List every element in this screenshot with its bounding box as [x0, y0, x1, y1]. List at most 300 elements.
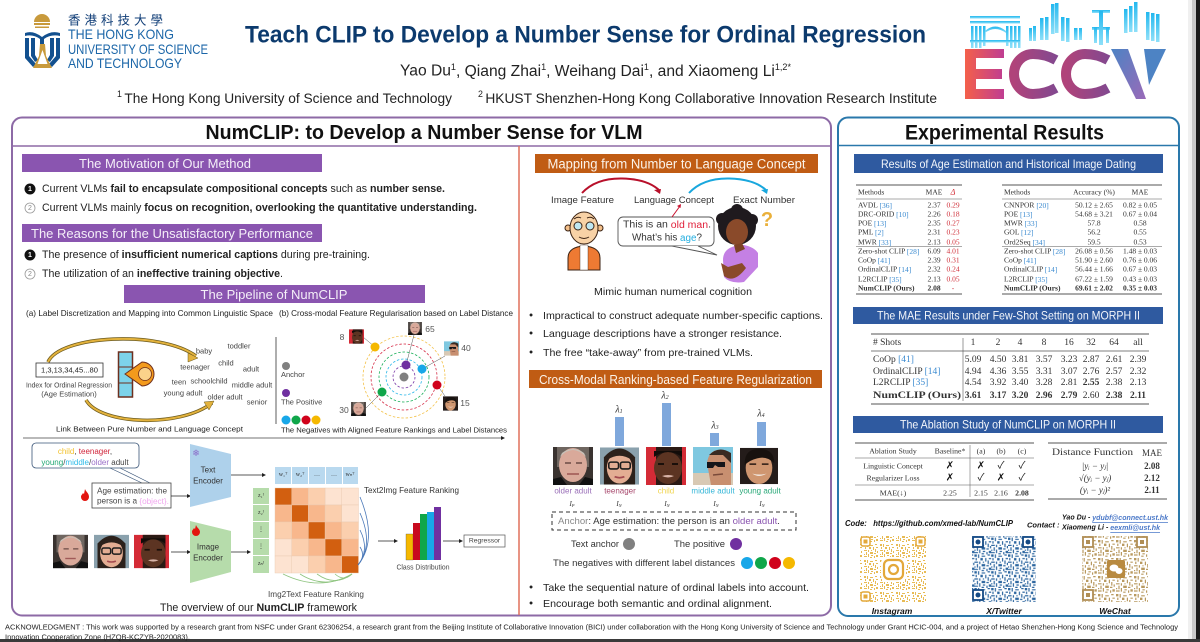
table: distance function: √(yᵢ − yⱼ) — [1079, 473, 1111, 483]
diagram: label discretization: toddler — [228, 342, 251, 350]
table: ablation: 2.16 — [994, 488, 1008, 498]
diagram: NumCLIP framework: ❄ — [192, 448, 200, 458]
diagram: feature regularisation: 8 — [340, 332, 345, 342]
table: historical image dating: 56.2 — [1087, 228, 1101, 236]
table: distance function: 2.11 — [1144, 485, 1160, 495]
logo: HKUST: 香港科技大學 — [68, 10, 163, 28]
table: few-shot: OrdinalCLIP [14] — [873, 367, 940, 377]
table: few-shot: L2RCLIP [35] — [873, 378, 928, 388]
table: distance function: |yᵢ − yⱼ| — [1082, 461, 1108, 471]
table: few-shot: 2.61 — [1106, 355, 1123, 365]
table: age estimation: AVDL [36] — [858, 200, 892, 210]
table: historical image dating: MWR [33] — [1004, 218, 1037, 228]
lambda bars: λ — [661, 390, 666, 402]
table: age estimation: 0.18 — [946, 210, 960, 218]
lambda bars: λ — [711, 420, 716, 432]
faces row: child — [658, 486, 674, 496]
diagram: mapping — [551, 178, 795, 298]
motivation point 2: 2 — [28, 205, 32, 212]
table: distance function: 2.08 — [1144, 461, 1160, 471]
table: historical image dating: 69.61 ± 2.02 — [1075, 284, 1113, 292]
legend — [553, 538, 795, 569]
logo: HKUST: THE HONG KONG — [68, 26, 174, 42]
lambda bars: 2 — [666, 395, 669, 401]
diagram: NumCLIP framework: w₁ᵀ — [279, 472, 288, 478]
subtitle b: (b) Cross-modal Feature Regularisation based on Label Distance — [279, 308, 513, 318]
diagram: NumCLIP framework — [32, 443, 505, 599]
table: few-shot: 3.92 — [990, 378, 1007, 388]
diagram: label discretization: young adult — [164, 388, 203, 398]
diagram: feature regularisation: 65 — [425, 324, 435, 334]
legend: The negatives with different label distances — [553, 558, 736, 568]
mapping bullet list: The free “take-away” from pre-trained VLMs. — [543, 347, 753, 359]
diagram: label discretization: middle adult — [232, 380, 273, 390]
table: age estimation: 0.29 — [946, 200, 960, 210]
faces row: N — [715, 502, 720, 508]
table: ablation: 2.08 — [1015, 488, 1029, 498]
reasons point 2: The utilization of an ineffective training objective. — [42, 268, 283, 280]
speech bubble: What’s his age? — [632, 232, 702, 244]
table: historical image dating: 67.22 ± 1.59 — [1075, 274, 1113, 284]
table: age estimation: 2.13 — [927, 274, 941, 284]
table: distance function: 2.12 — [1144, 473, 1160, 483]
heading: ablation — [853, 416, 1163, 433]
table: ablation: ✓ — [978, 472, 985, 484]
table: age estimation: 0.05 — [946, 274, 960, 284]
diagram: feature regularisation: 30 — [339, 405, 349, 415]
icon: thinking woman: ? — [761, 209, 773, 231]
diagram: NumCLIP framework: Age estimation: the — [97, 486, 168, 496]
table: historical image dating: 0.76 ± 0.06 — [1123, 256, 1157, 264]
diagram: NumCLIP framework: z₁ᴵ — [258, 493, 265, 499]
table: age estimation: 2.31 — [927, 228, 941, 236]
heading: ablation: The Ablation Study of NumCLIP on MORPH II — [900, 418, 1116, 432]
table: age estimation: PML [2] — [858, 228, 884, 236]
table: few-shot: 4.50 — [990, 355, 1007, 365]
table: distance function: MAE — [1142, 448, 1163, 458]
diagram: label discretization: adult — [243, 364, 260, 374]
table: few-shot: 3.40 — [1012, 378, 1029, 388]
anchor sentence: Anchor: Age estimation: the person is an older adult . — [558, 516, 780, 526]
logo: HKUST: AND TECHNOLOGY — [68, 55, 183, 71]
table: few-shot: 3.57 — [1036, 355, 1053, 365]
table: few-shot: 2.60 — [1083, 391, 1100, 401]
diagram: label discretization: child — [218, 358, 234, 368]
ranking bullet list: Take the sequential nature of ordinal labels into account. — [543, 582, 809, 594]
logo: HKUST — [25, 10, 208, 71]
table: ablation: 2.25 — [943, 488, 957, 498]
authors: 1 — [541, 62, 546, 72]
faces row: N — [761, 502, 766, 508]
motivation point 1: 1 — [28, 186, 32, 193]
panel heading: NumCLIP: to Develop a Number Sense for VLM — [206, 122, 642, 144]
diagram: feature regularisation: The Positive — [281, 398, 322, 406]
diagram: label discretization: teen — [172, 378, 186, 386]
lambda bars: 3 — [715, 425, 719, 431]
diagram: NumCLIP framework: Text2Img Feature Ranking — [364, 485, 459, 495]
ranking bullet list: Encourage both semantic and ordinal alignment. — [543, 598, 772, 610]
table: ablation: (b) — [996, 446, 1006, 456]
table: few-shot: 64 — [1109, 338, 1119, 348]
diagram: label discretization: baby — [196, 346, 212, 356]
diagram: feature regularisation: The Negatives with Aligned Feature Rankings and Label Distances — [281, 426, 507, 434]
authors: 1 — [451, 62, 456, 72]
acknowledgment — [5, 622, 1178, 642]
faces row — [553, 447, 781, 508]
table: few-shot: 3.28 — [1036, 378, 1053, 388]
table: historical image dating: CNNPOR [20] — [1004, 200, 1049, 210]
table: few-shot: 3.61 — [965, 391, 982, 401]
table: ablation: ✗ — [977, 460, 985, 472]
table: distance function: (yᵢ − yⱼ)² — [1080, 485, 1110, 495]
table: historical image dating: CoOp [41] — [1004, 256, 1036, 264]
table: historical image dating: Zero-shot CLIP [28] — [1004, 246, 1065, 256]
table: age estimation: 2.39 — [927, 256, 941, 264]
lambda bars: 4 — [762, 412, 765, 419]
faces row: teenager — [604, 486, 636, 496]
table: few-shot: 2.13 — [1130, 378, 1147, 388]
table: age estimation: 2.32 — [927, 264, 941, 274]
diagram: label discretization: Index for Ordinal Regression — [26, 380, 112, 390]
table: age estimation: 2.26 — [927, 210, 941, 218]
table: few-shot: 3.31 — [1036, 367, 1053, 377]
faces row: N — [618, 502, 623, 508]
faces row: I — [616, 500, 619, 508]
mapping bullet list: Language descriptions have a stronger resistance. — [543, 328, 782, 340]
table: few-shot: 16 — [1064, 338, 1074, 348]
table: ablation: ✗ — [946, 460, 954, 472]
faces row: N — [666, 502, 671, 508]
acknowledgment: ACKNOWLEDGMENT : This work was supported by a research grant from NSFC under Grant 62306254, a research grant from the Beijing Institute of Collaborative Innovation (BICI) under collaboration with the Hong Kong University of Science and Technology under Grant HCIC-004, and a project of Hetao Shenzhen-Hong Kong Science and Technology — [5, 622, 1178, 632]
lambda bars: λ — [757, 408, 762, 420]
speech bubble: This is an old man. — [623, 220, 711, 230]
table: few-shot: 5.09 — [965, 355, 982, 365]
table: historical image dating: NumCLIP (Ours) — [1004, 284, 1061, 292]
diagram: label discretization: 1,3,13,34,45...80 — [41, 366, 98, 374]
table: age estimation: - — [952, 284, 955, 292]
heading: age estimation: Results of Age Estimation and Historical Image Dating — [881, 157, 1136, 171]
table: age estimation: 4.01 — [946, 246, 960, 256]
table: historical image dating: 26.08 ± 0.56 — [1075, 246, 1113, 256]
authors: 1,2* — [775, 62, 791, 72]
table: few-shot: 4.36 — [990, 367, 1007, 377]
mapping bullet list: • — [529, 310, 533, 322]
contact: Yao Du - ydubf@connect.ust.hk — [1062, 512, 1169, 522]
contact: Contact : — [1027, 520, 1060, 530]
table: ablation: Ablation Study — [869, 446, 917, 456]
diagram: NumCLIP framework: Regressor — [469, 538, 501, 544]
table: few-shot: 2.39 — [1130, 355, 1147, 365]
table: ablation: Linguistic Concept — [863, 462, 924, 470]
diagram: NumCLIP framework: Class Distribution — [396, 564, 450, 572]
diagram: mapping: Mimic human numerical cognition — [594, 286, 752, 298]
table: historical image dating: Methods — [1004, 188, 1030, 196]
table: age estimation: 2.13 — [927, 238, 941, 246]
table: few-shot: 2.38 — [1106, 391, 1123, 401]
diagram: mapping: Language Concept — [634, 195, 715, 205]
heading: ranking: Cross-Modal Ranking-based Feature Regularization — [539, 372, 812, 387]
table: historical image dating: MAE — [1132, 188, 1149, 196]
table: historical image dating: 0.67 ± 0.03 — [1123, 264, 1157, 274]
table: historical image dating: GOL [12] — [1004, 228, 1034, 236]
table: few-shot: 2.87 — [1083, 355, 1100, 365]
mapping bullet list: • — [529, 346, 533, 358]
diagram: NumCLIP framework: Encoder — [193, 554, 223, 562]
table: age estimation: 0.05 — [946, 238, 960, 246]
QR code: Instagram — [860, 536, 927, 616]
affiliation 2: HKUST Shenzhen-Hong Kong Collaborative Innovation Research Institute — [485, 90, 937, 106]
diagram: label discretization: senior — [247, 398, 268, 406]
table: few-shot: 3.17 — [990, 391, 1007, 401]
table: age estimation: 2.08 — [927, 284, 941, 292]
faces row: older adult — [554, 486, 592, 496]
table: age estimation: Zero-shot CLIP [28] — [858, 246, 919, 256]
table: few-shot: 3.55 — [1012, 367, 1029, 377]
QR code: Instagram: Instagram — [872, 606, 913, 616]
code link: Code: https://github.com/xmed-lab/NumCLIP — [845, 518, 1013, 528]
authors: , Qiang Zhai — [456, 62, 541, 80]
heading: motivation: The Motivation of Our Method — [79, 156, 251, 171]
ranking bullet list — [529, 582, 809, 610]
table: historical image dating: 51.90 ± 2.60 — [1075, 256, 1113, 264]
diagram: label discretization — [26, 339, 273, 434]
table: historical image dating: 0.53 — [1133, 238, 1147, 246]
reasons point 2: 2 — [28, 271, 32, 278]
contact — [1027, 512, 1169, 532]
heading: pipeline — [124, 285, 425, 303]
diagram: NumCLIP framework: Encoder — [193, 476, 223, 486]
heading: reasons: The Reasons for the Unsatisfactory Performance — [31, 226, 313, 241]
faces row: P — [571, 502, 575, 508]
authors: , and Xiaomeng Li — [649, 62, 775, 80]
table: age estimation: 0.24 — [946, 264, 960, 274]
authors: , Weihang Dai — [546, 62, 644, 80]
table: historical image dating: 59.5 — [1087, 238, 1101, 246]
diagram: NumCLIP framework: ⋮ — [258, 527, 264, 533]
affiliation 2: 2 — [478, 89, 485, 99]
table: few-shot: 2.38 — [1106, 378, 1123, 388]
diagram: feature regularisation — [276, 322, 507, 434]
diagram: NumCLIP framework: Text — [201, 466, 216, 474]
table: historical image dating: 0.55 — [1133, 228, 1147, 236]
QR code: WeChat: WeChat — [1099, 606, 1132, 616]
table: ablation: ✓ — [998, 460, 1005, 472]
table: few-shot: 2.81 — [1061, 378, 1078, 388]
diagram: NumCLIP framework: person is a {object}. — [97, 496, 169, 506]
table: age estimation: 0.31 — [946, 256, 960, 264]
logo: ECCV — [965, 2, 1166, 99]
table: few-shot: NumCLIP (Ours) — [873, 390, 961, 401]
reasons point 1: 1 — [28, 252, 32, 259]
table: historical image dating: POE [13] — [1004, 210, 1033, 218]
table: few-shot: 4 — [1018, 338, 1023, 348]
caption: framework: The overview of our NumCLIP framework — [160, 602, 357, 614]
table: ablation: ✓ — [1019, 472, 1026, 484]
lambda bars — [614, 390, 766, 446]
table: age estimation — [856, 185, 962, 294]
diagram: feature regularisation: 40 — [461, 343, 471, 353]
table: few-shot: 2.76 — [1083, 367, 1100, 377]
diagram: NumCLIP framework: ⋮ — [258, 544, 264, 550]
diagram: NumCLIP framework: … — [331, 472, 337, 478]
diagram: ranking — [552, 390, 796, 569]
table: few-shot: 2 — [996, 338, 1001, 348]
heading: motivation — [22, 154, 322, 172]
table: historical image dating: L2RCLIP [35] — [1004, 274, 1048, 284]
diagram: label discretization: schoolchild — [190, 376, 228, 386]
title: Teach CLIP to Develop a Number Sense for Ordinal Regression — [245, 22, 926, 48]
table: age estimation: 2.35 — [927, 218, 941, 228]
table: ablation — [855, 443, 1034, 500]
table: few-shot: 2.57 — [1106, 367, 1123, 377]
diagram: NumCLIP framework: w₂ᵀ — [296, 472, 305, 478]
faces row: young adult — [739, 486, 781, 496]
table: ablation: ✓ — [1019, 460, 1026, 472]
diagram: label discretization: teenager — [180, 362, 210, 372]
table: historical image dating: 0.67 ± 0.04 — [1123, 210, 1157, 218]
table: historical image dating: OrdinalCLIP [14] — [1004, 264, 1057, 274]
diagram: NumCLIP framework: wₙᵀ — [346, 472, 355, 478]
icon: old man — [565, 212, 603, 270]
faces row: I — [759, 500, 762, 508]
table: ablation: (c) — [1018, 446, 1027, 456]
faces row: middle adult — [691, 486, 735, 496]
table: age estimation: 0.27 — [946, 218, 960, 228]
table: age estimation: CoOp [41] — [858, 256, 890, 264]
heading: age estimation — [854, 154, 1163, 173]
table: historical image dating: 0.43 ± 0.03 — [1123, 274, 1157, 284]
table: historical image dating — [1002, 185, 1162, 294]
diagram: NumCLIP framework: z₂ᴵ — [258, 510, 265, 516]
table: age estimation: Δ — [950, 188, 956, 196]
table: historical image dating: 0.35 ± 0.03 — [1123, 284, 1157, 292]
table: age estimation: MAE — [926, 188, 943, 196]
panel: NumCLIP — [12, 118, 831, 616]
diagram: NumCLIP framework: Image — [197, 542, 220, 552]
motivation point 1: Current VLMs fail to encapsulate compositional concepts such as number sense. — [42, 183, 445, 195]
diagram: NumCLIP framework: Img2Text Feature Ranking — [268, 589, 364, 599]
table: few-shot: 4.54 — [965, 378, 982, 388]
table: few-shot: 3.07 — [1061, 367, 1078, 377]
table: historical image dating: 57.8 — [1087, 218, 1101, 228]
QR code: X/Twitter: X/Twitter — [985, 606, 1022, 616]
table: few-shot: 3.20 — [1012, 391, 1029, 401]
table: few-shot: # Shots — [873, 338, 902, 348]
table: age estimation: POE [13] — [858, 218, 887, 228]
ranking bullet list: • — [529, 582, 533, 594]
panel: experimental results — [838, 118, 1179, 616]
motivation point 2: Current VLMs mainly focus on recognition, overlooking the quantitative understanding. — [42, 202, 477, 214]
diagram: feature regularisation: 15 — [460, 398, 470, 408]
table: ablation: Baseline* — [935, 446, 965, 456]
table: historical image dating: Accuracy (%) — [1073, 188, 1115, 196]
table: ablation: ✗ — [946, 472, 954, 484]
table: few-shot: 2.32 — [1130, 367, 1147, 377]
table: few-shot: all — [1133, 338, 1143, 348]
table: distance function: Distance Function — [1052, 448, 1133, 458]
table: historical image dating: 0.82 ± 0.05 — [1123, 200, 1157, 210]
faces row: I — [569, 500, 572, 508]
table: age estimation: L2RCLIP [35] — [858, 274, 902, 284]
table: ablation: MAE(↓) — [880, 488, 907, 498]
panel heading: Experimental Results — [905, 122, 1104, 144]
QR code: X/Twitter — [972, 536, 1036, 616]
authors: 1 — [644, 62, 649, 72]
diagram: label discretization: Link Between Pure Number and Language Concept — [56, 424, 244, 434]
table: few-shot: 8 — [1042, 338, 1047, 348]
table: historical image dating: 50.12 ± 2.65 — [1075, 200, 1113, 210]
lambda bars: λ — [615, 404, 620, 416]
table: age estimation: 0.23 — [946, 228, 960, 236]
arrow: separator — [23, 436, 505, 440]
table: few-shot: 32 — [1086, 338, 1096, 348]
diagram: NumCLIP framework: zₙᴵ — [258, 561, 265, 567]
table: ablation: 2.15 — [974, 488, 988, 498]
affiliation 1: The Hong Kong University of Science and Technology — [124, 90, 452, 106]
diagram: mapping: Image Feature — [551, 195, 614, 205]
table: historical image dating: 56.44 ± 1.66 — [1075, 264, 1113, 274]
lambda bars: 1 — [620, 409, 623, 415]
mapping bullet list — [529, 310, 823, 359]
reasons point 1: The presence of insufficient numerical captions during pre-training. — [42, 249, 370, 261]
speech bubble — [618, 204, 717, 255]
table: ablation: Regularizer Loss — [866, 474, 920, 482]
acknowledgment: Innovation Cooperation Zone (HZQB-KCZYB-2020083). — [5, 632, 190, 642]
table: few-shot: 3.81 — [1012, 355, 1029, 365]
diagram: label discretization: older adult — [207, 392, 243, 402]
table: few-shot: 2.79 — [1061, 391, 1078, 401]
table: historical image dating: 1.48 ± 0.03 — [1123, 246, 1157, 256]
diagram: NumCLIP framework: young/middle/older adult — [41, 458, 129, 466]
table: few-shot: 2.55 — [1083, 378, 1100, 388]
table: few-shot: 2.11 — [1130, 391, 1146, 401]
anchor sentence — [552, 512, 796, 530]
icon: thinking woman — [716, 204, 773, 282]
legend: The positive — [674, 539, 725, 549]
table: age estimation: 6.09 — [927, 246, 941, 256]
diagram: mapping: Exact Number — [733, 195, 795, 205]
table: historical image dating: 54.68 ± 3.21 — [1075, 210, 1113, 218]
mapping bullet list: • — [529, 328, 533, 340]
table: few-shot: 2.96 — [1036, 391, 1053, 401]
table: ablation: ✗ — [997, 472, 1005, 484]
heading: few-shot: The MAE Results under Few-Shot Setting on MORPH II — [877, 308, 1140, 322]
table: few-shot: 4.94 — [965, 367, 982, 377]
subtitle a: (a) Label Discretization and Mapping into Common Linguistic Space — [26, 308, 273, 318]
affiliation 1: 1 — [117, 89, 124, 99]
diagram: NumCLIP framework: … — [314, 472, 320, 478]
heading: pipeline: The Pipeline of NumCLIP — [200, 287, 348, 302]
table: age estimation: MWR [33] — [858, 238, 891, 246]
table: few-shot — [871, 334, 1149, 404]
table: few-shot: CoOp [41] — [873, 355, 914, 365]
table: distance function — [1048, 443, 1167, 499]
table: age estimation: 2.37 — [927, 200, 941, 210]
diagram: NumCLIP framework: child, teenager, — [58, 446, 112, 456]
logo: HKUST: UNIVERSITY OF SCIENCE — [68, 41, 208, 57]
table: few-shot: 1 — [971, 338, 976, 348]
legend: Text anchor — [571, 539, 619, 549]
heading: mapping: Mapping from Number to Language Concept — [548, 156, 806, 172]
table: historical image dating: 0.58 — [1133, 218, 1147, 228]
faces row: I — [664, 500, 667, 508]
table: ablation: (a) — [977, 446, 986, 456]
mapping bullet list: Impractical to construct adequate number-specific captions. — [543, 310, 823, 322]
table: age estimation: NumCLIP (Ours) — [858, 284, 915, 292]
authors: Yao Du — [400, 62, 451, 80]
table: historical image dating: Ord2Seq [34] — [1004, 238, 1045, 246]
table: age estimation: DRC-ORID [10] — [858, 210, 909, 218]
